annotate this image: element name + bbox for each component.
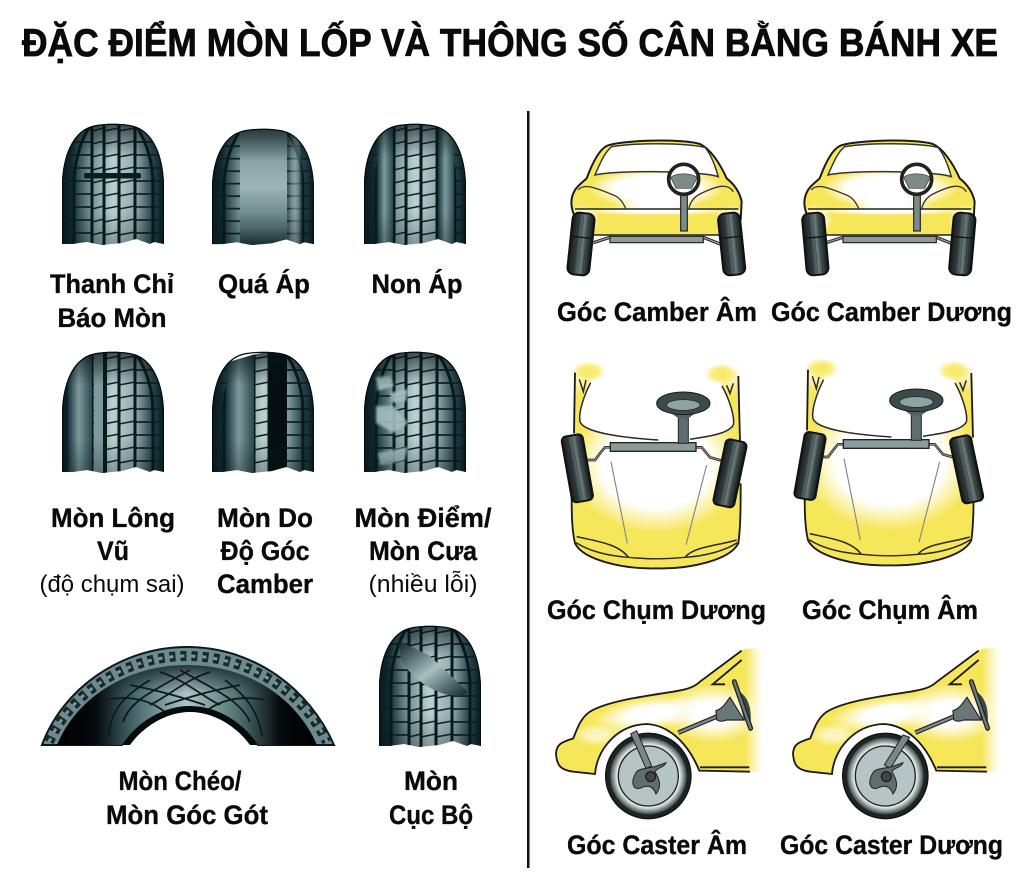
label: camber wear: Độ Góc xyxy=(220,536,310,566)
label: positive camber: Góc Camber Dương xyxy=(771,297,1012,327)
label: local wear xyxy=(389,766,473,830)
label: under inflated: Non Áp xyxy=(372,268,462,299)
label: cupping: (nhiều lỗi) xyxy=(368,571,478,598)
icon: over-inflated tire xyxy=(212,128,314,245)
vertical divider xyxy=(527,111,530,868)
icon: positive camber car xyxy=(796,137,985,276)
icon: positive caster car xyxy=(790,647,1000,819)
icon: under-inflated tire xyxy=(364,123,466,245)
label: wear indicator: Thanh Chỉ xyxy=(50,269,174,299)
label: positive toe: Góc Chụm Dương xyxy=(547,595,766,625)
label: cupping: Mòn Điểm/ xyxy=(354,503,492,533)
panel: wheel alignment xyxy=(547,137,1012,860)
label: negative caster: Góc Caster Âm xyxy=(567,829,747,860)
label: negative camber: Góc Camber Âm xyxy=(557,296,757,327)
label: camber wear: Camber xyxy=(217,569,313,599)
label: cupping xyxy=(354,503,492,598)
label: feathering xyxy=(40,503,184,598)
label: positive caster: Góc Caster Dương xyxy=(780,830,1003,860)
label: feathering: Mòn Lông xyxy=(51,503,175,533)
label: over inflated: Quá Áp xyxy=(218,268,310,299)
label: camber wear: Mòn Do xyxy=(217,503,313,533)
label: diagonal wear: Mòn Góc Gót xyxy=(106,800,268,830)
label: wear indicator xyxy=(50,269,174,333)
label: diagonal wear: Mòn Chéo/ xyxy=(118,766,242,796)
icon: local wear tire xyxy=(379,625,481,747)
icon: negative toe car xyxy=(794,350,984,570)
icon: camber wear tire xyxy=(210,349,314,473)
icon: positive toe car xyxy=(561,353,747,573)
panel: tire wear types xyxy=(40,123,492,830)
label: feathering: Vũ xyxy=(97,536,129,566)
label: feathering: (độ chụm sai) xyxy=(40,571,184,598)
label: negative toe: Góc Chụm Âm xyxy=(802,594,978,625)
label: local wear: Mòn xyxy=(404,766,458,796)
label: camber wear xyxy=(217,503,313,599)
icon: feathering tire xyxy=(62,351,164,473)
icon: spot cupping tire xyxy=(364,351,466,473)
label: wear indicator: Báo Mòn xyxy=(58,303,166,333)
icon: wear bar tire xyxy=(62,123,164,245)
label: cupping: Mòn Cưa xyxy=(369,536,478,566)
icon: diagonal wear tire xyxy=(42,647,334,745)
icon: negative camber car xyxy=(563,137,752,276)
label: diagonal wear xyxy=(106,766,268,830)
label: local wear: Cục Bộ xyxy=(389,800,473,830)
icon: negative caster car xyxy=(553,647,763,819)
